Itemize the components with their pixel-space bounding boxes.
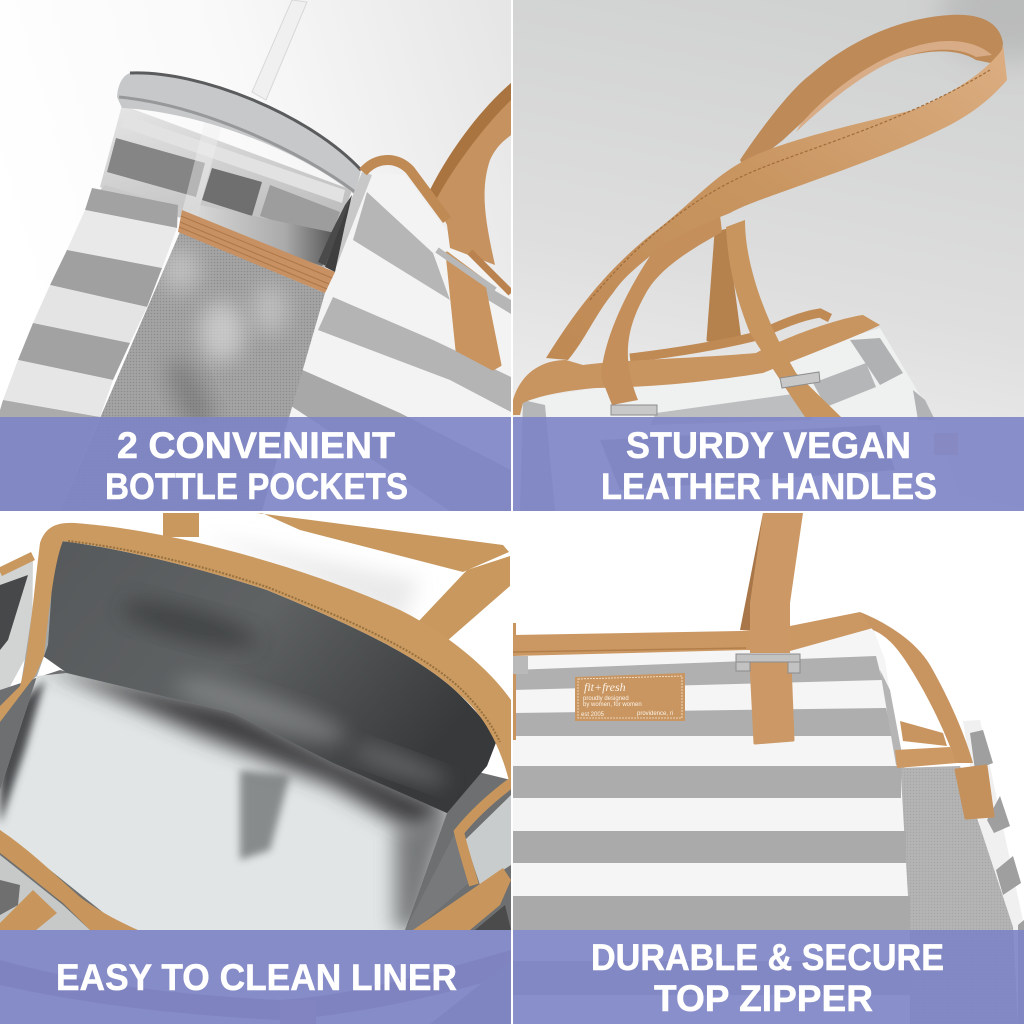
side panel stripes [963, 720, 1024, 1024]
side mesh pocket [898, 766, 1018, 1024]
bottom-left rim [0, 830, 138, 930]
right side wall [405, 783, 511, 930]
front stripes [513, 628, 910, 1024]
caption band: leather handles [513, 417, 1024, 511]
panel: top zipper [513, 513, 1024, 1024]
strap stitching [590, 70, 990, 300]
inner wall [43, 541, 497, 813]
panel 2 background [513, 0, 1024, 417]
panel: vegan leather handles [513, 0, 1024, 511]
loop inner face [796, 41, 992, 132]
straw [252, 0, 307, 100]
brand label [575, 673, 685, 721]
back rim [630, 313, 830, 358]
brand label: by women, for women [583, 702, 642, 708]
handle shadow edge [430, 83, 511, 198]
panel 4 background [513, 513, 1024, 1024]
trim stitched lower edge [513, 648, 746, 652]
bottom bag stripes [0, 930, 511, 1024]
panel: liner [0, 513, 511, 1024]
brand label: providence, ri [637, 711, 673, 717]
brand label: proudly designed [583, 696, 629, 702]
pocket binding [178, 210, 335, 293]
panel: bottle pockets [0, 0, 511, 511]
right dark corner [475, 905, 511, 930]
tumbler cup [100, 73, 361, 268]
bottom-left side fabric [0, 855, 90, 960]
top-right darker corner [940, 0, 1024, 60]
caption text: liner: EASY TO CLEAN LINER [56, 957, 457, 998]
shadow behind handle [252, 548, 416, 614]
side strap [437, 250, 500, 369]
liner backing [0, 670, 511, 930]
front handle [750, 513, 803, 653]
caption band: top zipper [513, 930, 1024, 1024]
caption text: leather handles: LEATHER HANDLES [601, 466, 937, 507]
bottom-right rim [413, 868, 511, 930]
back handle [163, 513, 510, 641]
back pocket trim [900, 721, 947, 746]
mesh pocket [60, 232, 325, 511]
liner floor [0, 665, 450, 930]
right down handle [726, 220, 841, 417]
brand label: est 2005 [581, 712, 605, 718]
right bag gusset strap [934, 433, 958, 455]
caption text: bottle pockets: BOTTLE POCKETS [105, 466, 408, 507]
buckles [611, 372, 820, 415]
left silver seam [21, 593, 52, 682]
front rim [513, 315, 880, 415]
pocket corner shadow [325, 195, 352, 272]
caption text: bottle pockets: 2 CONVENIENT [117, 425, 395, 466]
caption band: liner [0, 930, 511, 1024]
left edge strip [513, 623, 516, 740]
panel 1 background [247, 0, 511, 295]
buckle [736, 654, 800, 673]
bag top trim [363, 160, 447, 220]
strap end [956, 766, 993, 818]
right strap [860, 612, 973, 763]
left pocket stripes [0, 188, 178, 417]
front big strap [546, 43, 1007, 360]
bag body [522, 328, 934, 417]
side gusset [880, 670, 905, 770]
second handle [601, 215, 722, 405]
caption text: top zipper: DURABLE & SECURE [591, 937, 944, 978]
back handle [708, 230, 740, 340]
top trim [513, 612, 873, 656]
front pocket trim [895, 747, 957, 768]
caption text: leather handles: STURDY VEGAN [626, 425, 911, 466]
left outer wall [0, 556, 33, 705]
caption band: bottle pockets [0, 417, 511, 511]
caption text: top zipper: TOP ZIPPER [654, 978, 873, 1019]
brand label: fit+fresh [584, 680, 626, 694]
lower strap [751, 663, 793, 743]
upper loop [740, 15, 1003, 170]
back handle [740, 513, 772, 630]
left buckle [513, 656, 528, 674]
back handle [430, 83, 511, 265]
trim to right [470, 252, 511, 293]
panel 3 background [0, 513, 511, 1024]
right bag side stripes [292, 172, 511, 417]
zipper rim [0, 523, 511, 790]
